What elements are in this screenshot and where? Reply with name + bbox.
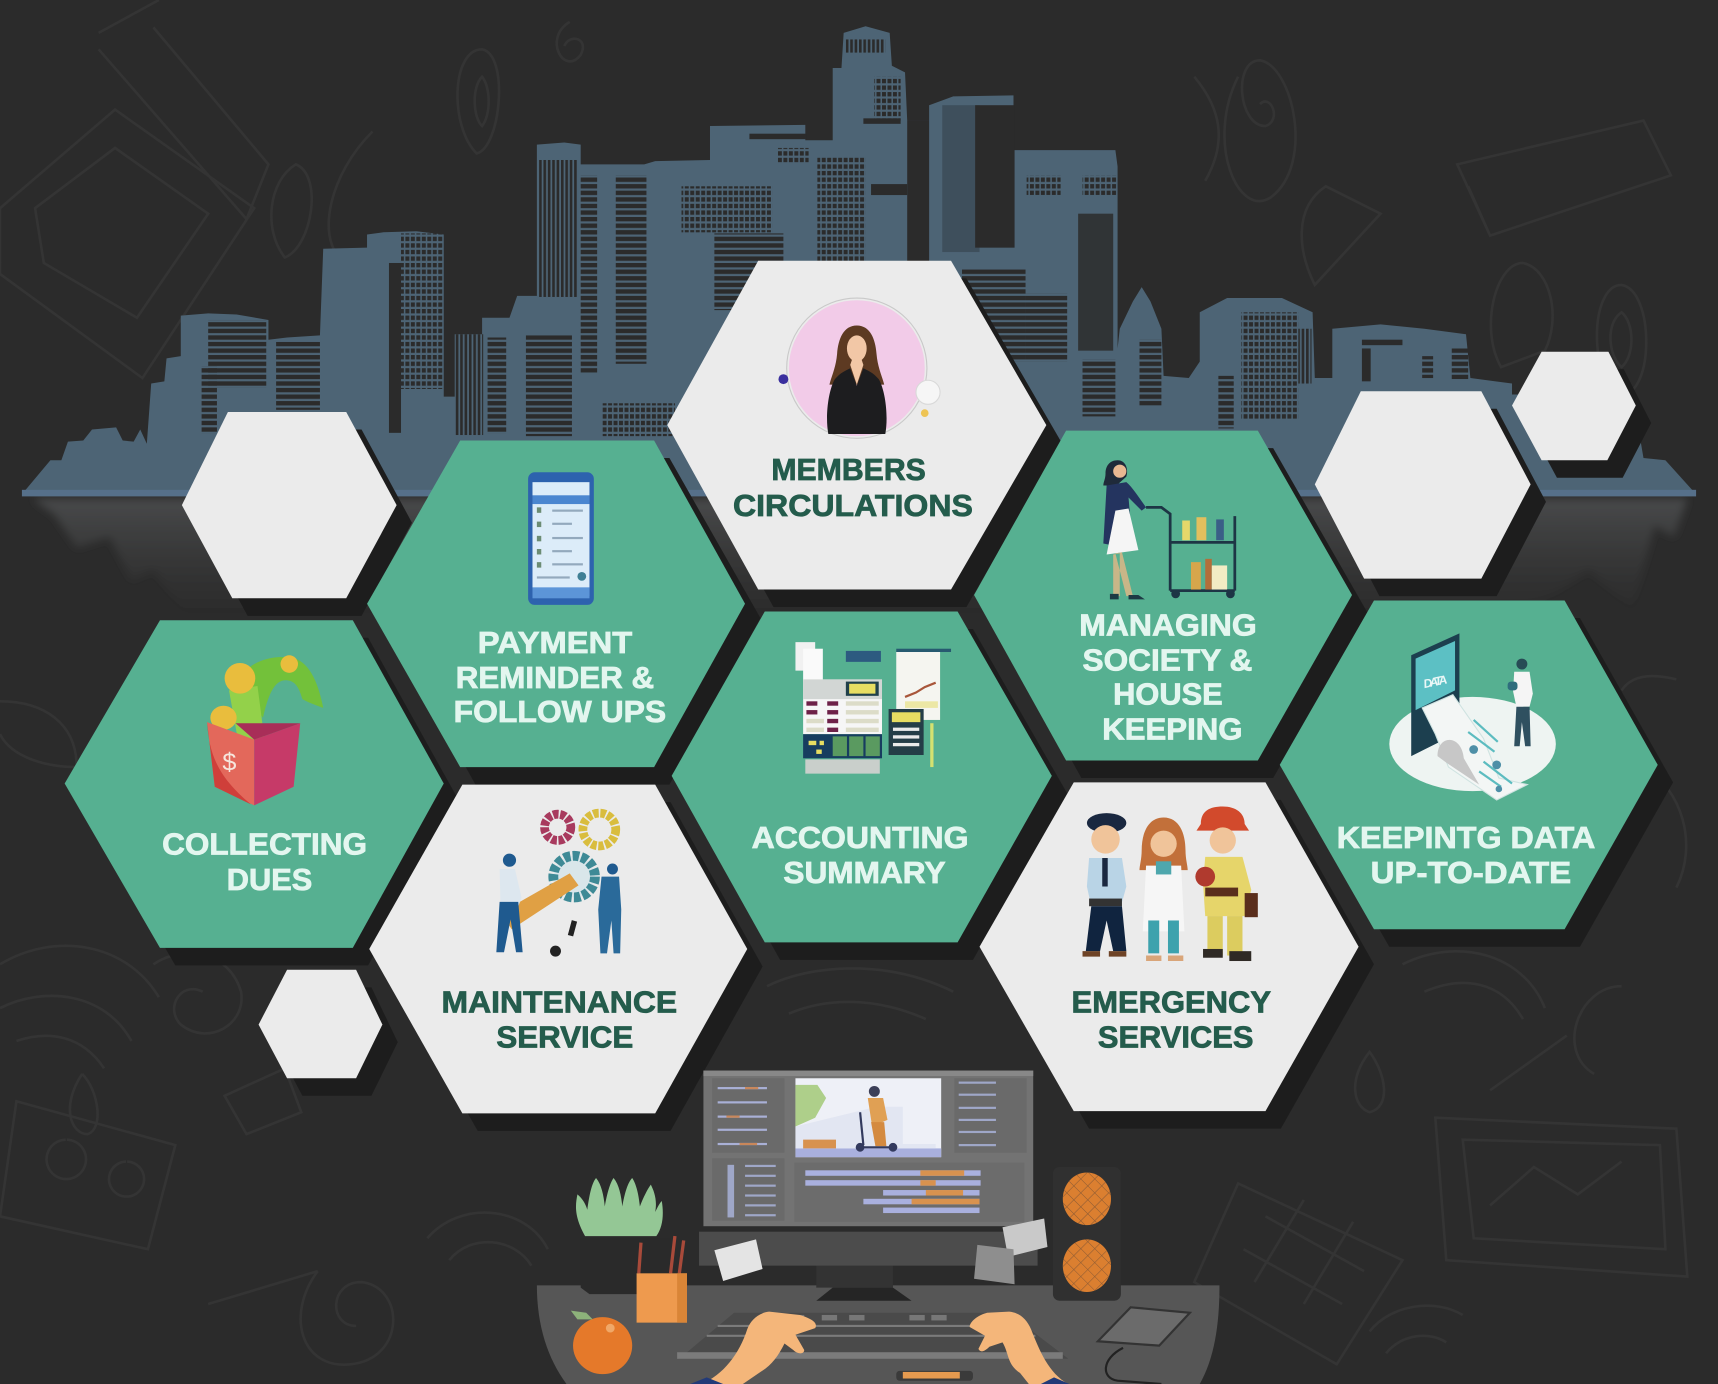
monitor chin bbox=[699, 1232, 1038, 1266]
city skyline bbox=[22, 26, 1696, 614]
doctor bbox=[1139, 817, 1188, 961]
small white hexagon right bbox=[1512, 352, 1636, 460]
panel: payment reminder bbox=[367, 441, 745, 767]
heading: managing society and house keeping: HOUSE bbox=[1113, 679, 1223, 712]
blank white hexagon right bbox=[1315, 391, 1531, 579]
heading: maintenance service: MAINTENANCE bbox=[442, 987, 677, 1020]
blank white hexagon left bbox=[182, 412, 397, 598]
heading: managing society and house keeping bbox=[1079, 610, 1257, 747]
icon: mechanics with gears bbox=[496, 813, 621, 957]
panel: collecting dues bbox=[65, 620, 444, 948]
icon: cash register and calculator bbox=[795, 642, 951, 774]
hexagon shadows bbox=[80, 278, 1673, 1131]
heading: payment reminder bbox=[454, 627, 666, 729]
skyline windows bbox=[202, 39, 1468, 436]
heading: members circulations: MEMBERS bbox=[771, 454, 926, 487]
skyline reflection bbox=[33, 499, 1687, 614]
skyline silhouette bbox=[22, 26, 1696, 494]
icon: phone bbox=[528, 472, 594, 605]
heading: maintenance service: SERVICE bbox=[496, 1022, 633, 1055]
icon: police officer, doctor and firefighter bbox=[1083, 807, 1258, 961]
timeline tracks bbox=[805, 1170, 981, 1213]
firefighter bbox=[1195, 807, 1258, 961]
heading: payment reminder: FOLLOW UPS bbox=[454, 696, 666, 729]
video preview bbox=[795, 1078, 941, 1157]
heading: members circulations: CIRCULATIONS bbox=[733, 490, 973, 523]
icon: data tablet and report bbox=[1389, 633, 1556, 800]
heading: keeping data up to date bbox=[1337, 822, 1595, 890]
heading: accounting summary: ACCOUNTING bbox=[752, 822, 969, 855]
heading: emergency services bbox=[1072, 987, 1271, 1055]
panel: managing society and house keeping bbox=[974, 431, 1352, 760]
heading: accounting summary: SUMMARY bbox=[783, 857, 946, 890]
panel: keeping data up to date bbox=[1280, 601, 1658, 929]
panel: maintenance service bbox=[369, 785, 747, 1113]
heading: managing society and house keeping: SOCIETY & bbox=[1083, 645, 1252, 678]
heading: keeping data up to date: UP-TO-DATE bbox=[1371, 857, 1571, 890]
heading: managing society and house keeping: KEEPING bbox=[1102, 714, 1242, 747]
sticky notes bbox=[714, 1219, 1047, 1284]
pen bbox=[896, 1371, 973, 1381]
keyboard bbox=[677, 1313, 1068, 1359]
plant bbox=[576, 1178, 671, 1294]
heading: members circulations bbox=[733, 454, 973, 523]
heading: managing society and house keeping: MANAGING bbox=[1079, 610, 1257, 643]
illustration: editing desk bbox=[537, 1071, 1219, 1384]
heading: collecting dues: COLLECTING bbox=[162, 829, 367, 862]
heading: collecting dues bbox=[162, 829, 367, 897]
heading: emergency services: SERVICES bbox=[1098, 1022, 1253, 1055]
heading: payment reminder: REMINDER & bbox=[456, 662, 654, 695]
icon: housekeeper with cart bbox=[1103, 460, 1235, 599]
heading: payment reminder: PAYMENT bbox=[478, 627, 633, 660]
panel: emergency services bbox=[980, 782, 1359, 1111]
speaker bbox=[1053, 1167, 1121, 1301]
panel: members circulations bbox=[667, 261, 1046, 590]
heading: keeping data up to date: KEEPINTG DATA bbox=[1337, 822, 1595, 855]
hands bbox=[690, 1312, 1069, 1384]
pencil holder bbox=[637, 1236, 687, 1323]
monitor bbox=[703, 1071, 1033, 1226]
monitor stand bbox=[816, 1266, 912, 1301]
apple bbox=[571, 1311, 632, 1374]
icon: data tablet and report: DATA bbox=[1422, 672, 1449, 691]
police officer bbox=[1083, 813, 1126, 957]
skyline base bbox=[22, 490, 1696, 496]
heading: emergency services: EMERGENCY bbox=[1072, 987, 1271, 1020]
small white hexagon lower left bbox=[259, 970, 382, 1078]
heading: collecting dues: DUES bbox=[227, 864, 312, 897]
heading: maintenance service bbox=[442, 987, 677, 1055]
icon: wallet with money and coins: $ bbox=[222, 748, 236, 776]
smartphone with cable bbox=[1098, 1307, 1190, 1384]
desk bbox=[537, 1285, 1219, 1384]
icon: woman in circle bbox=[778, 298, 940, 438]
panel: accounting summary bbox=[672, 611, 1052, 942]
heading: accounting summary bbox=[752, 822, 969, 890]
icon: wallet with money and coins bbox=[207, 655, 323, 805]
